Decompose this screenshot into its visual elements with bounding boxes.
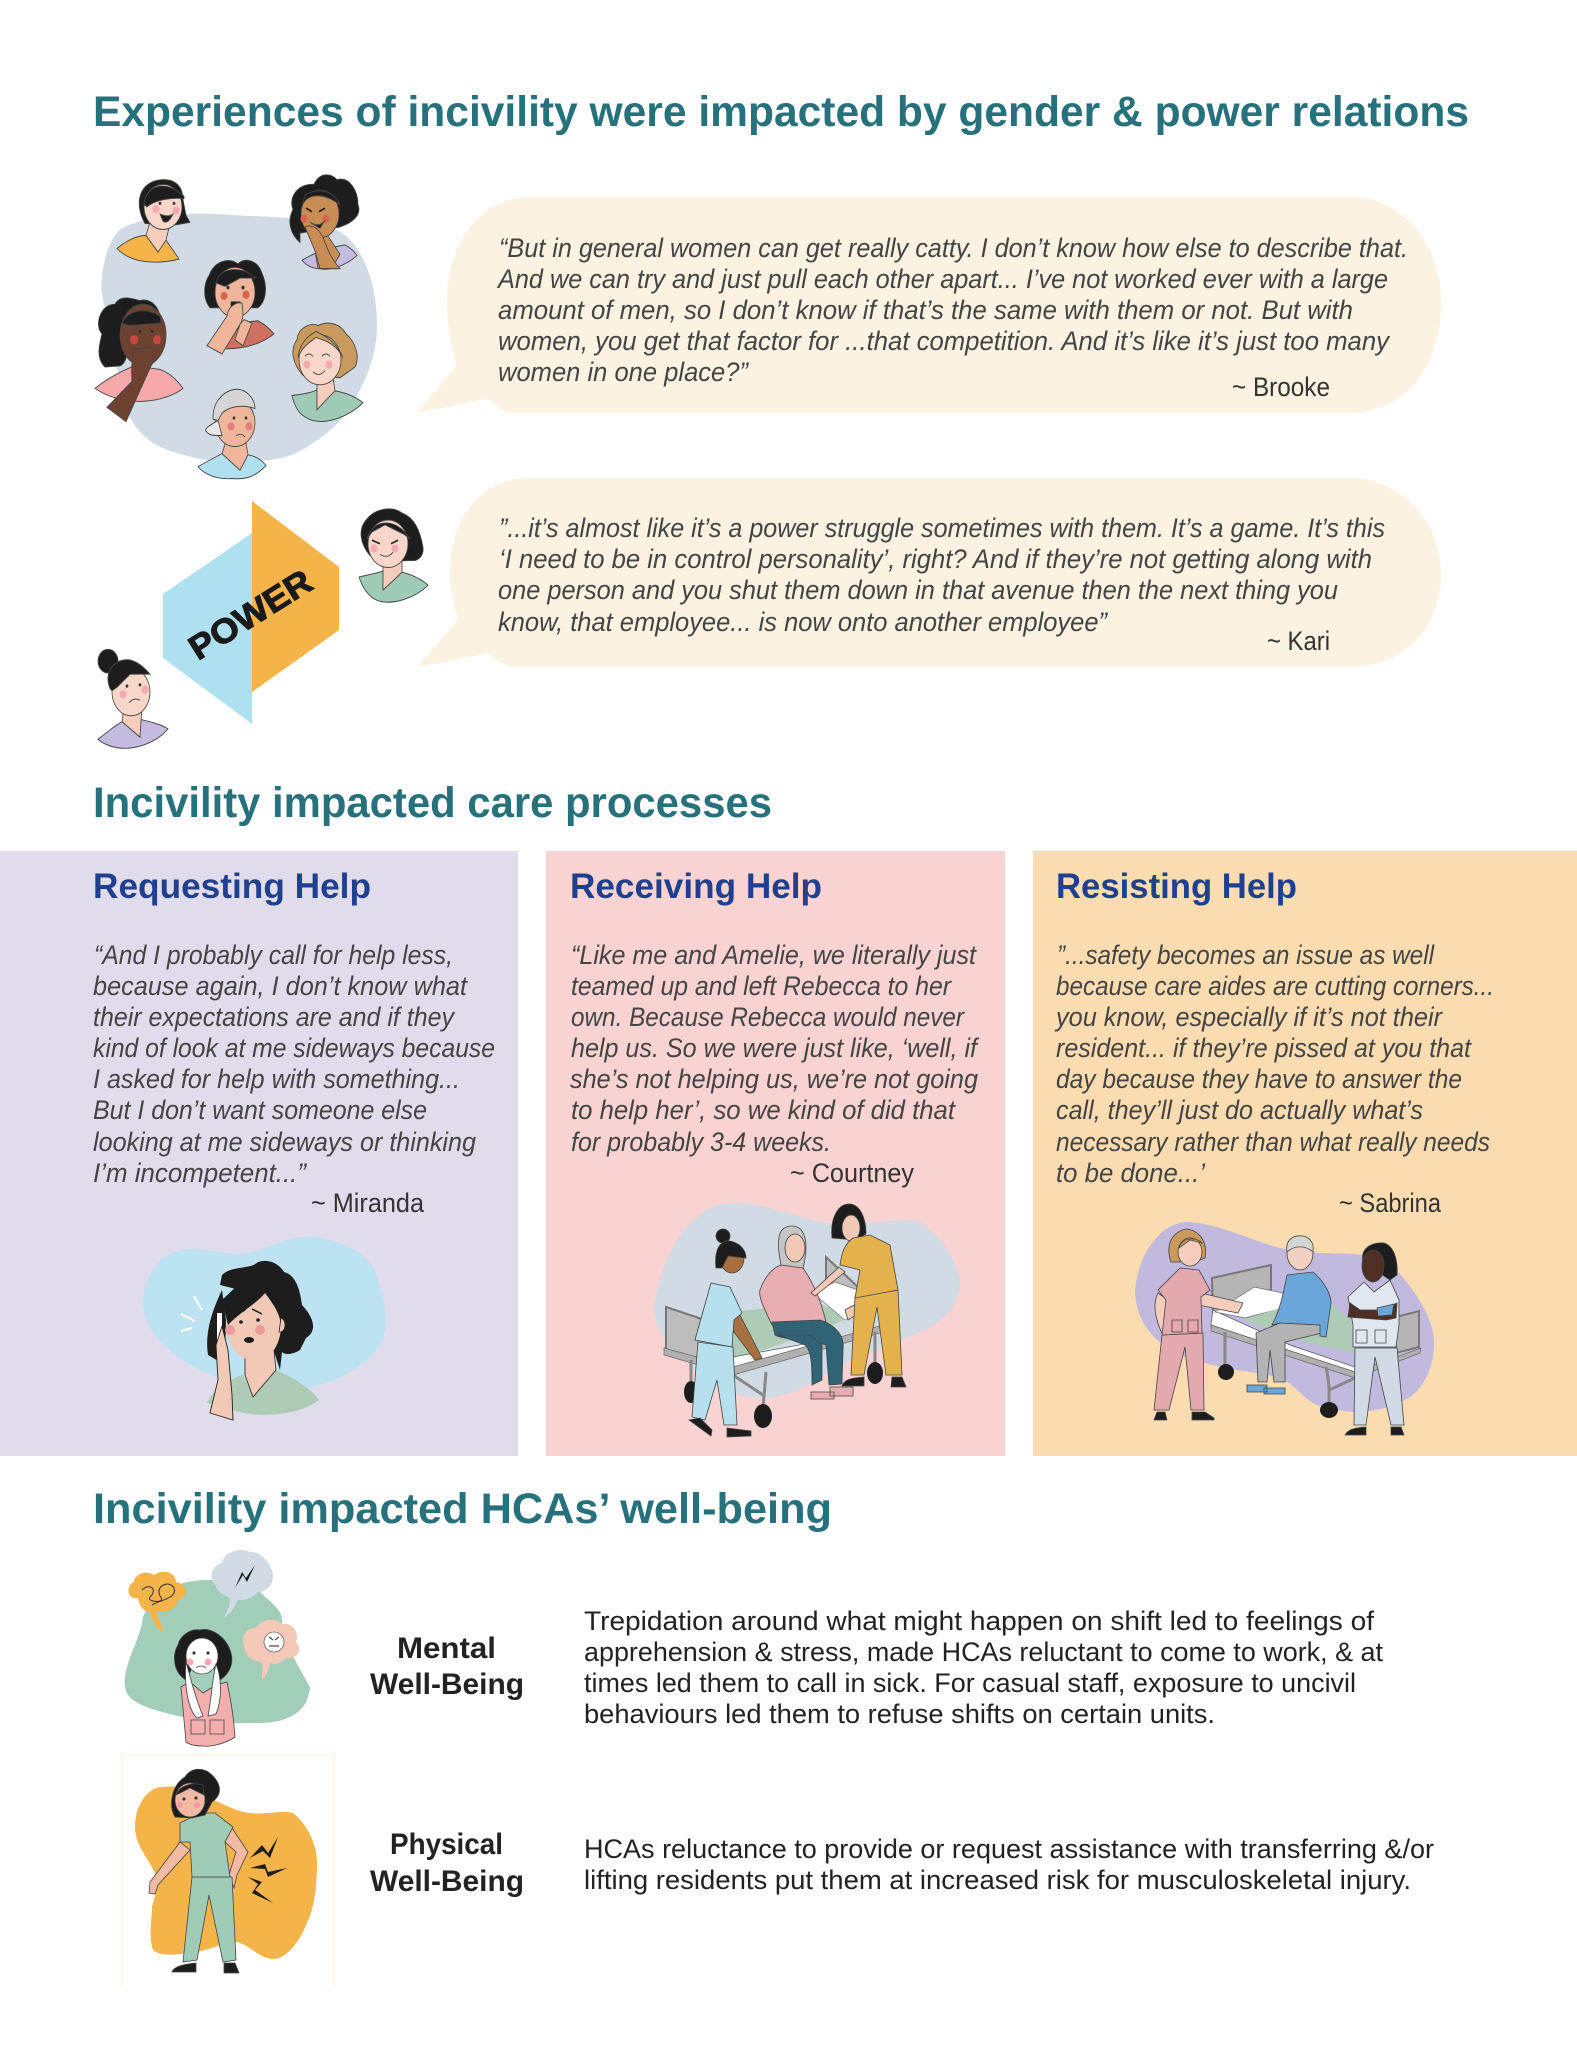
heading: well-being: Incivility impacted HCAs’ well-being (93, 1485, 832, 1533)
label: Mental Well-Being: Well-Being (370, 1668, 524, 1701)
title: Experiences of incivility were impacted by gender & power relations (93, 88, 1469, 136)
illustration: aide with back pain (122, 1755, 334, 1987)
panel: Receiving Help: ~ Courtney (790, 1158, 914, 1188)
speech bubble: Brooke quote (417, 197, 1441, 413)
resident (1247, 1236, 1331, 1394)
panel: Resisting Help: to be done...’ (1056, 1158, 1206, 1188)
aide in pink (1154, 1229, 1243, 1420)
text: mental well-being description: behaviours led them to refuse shifts on certain units. (584, 1699, 1215, 1729)
thought cloud: tangled (128, 1572, 186, 1632)
panel: Resisting Help: ”...safety becomes an issue as well (1057, 940, 1435, 970)
illustration: worried woman on phone (143, 1237, 386, 1420)
illustration: stressed aide with thought clouds (125, 1550, 310, 1746)
panel: Requesting Help: But I don’t want someone else (93, 1095, 427, 1125)
person: left, dark skin (95, 298, 183, 422)
people in the power struggle (98, 509, 428, 748)
power hexagon: POWER (182, 562, 319, 668)
illustration: power struggle (98, 501, 428, 748)
label: Mental Well-Being: Mental (397, 1632, 496, 1665)
person: centre (205, 260, 274, 354)
panel: Requesting Help: I asked for help with something... (93, 1064, 460, 1094)
panel: Resisting Help: necessary rather than what really needs (1056, 1127, 1490, 1157)
person: right, blonde (292, 323, 363, 421)
aide in white (1345, 1243, 1404, 1435)
person: top right (290, 175, 359, 269)
panel: Resisting Help: you know, especially if it’s not their (1054, 1002, 1443, 1032)
label: Physical Well-Being: Well-Being (370, 1865, 524, 1898)
text: mental well-being description: Trepidation around what might happen on shift led to feelings of (584, 1606, 1375, 1636)
speech bubble: Brooke quote: women in one place?” (498, 357, 749, 387)
panel: Requesting Help: their expectations are and if they (93, 1002, 455, 1032)
speech bubble: Brooke quote: women, you get that factor for ...that competition. And it’s like it’s just too many (498, 326, 1390, 356)
panel: Requesting Help: because again, I don’t know what (93, 971, 468, 1001)
illustration: two aides helping a resident (654, 1203, 960, 1437)
panel: Requesting Help (0, 851, 518, 1456)
panel: Resisting Help: Resisting Help (1056, 867, 1297, 906)
label: Physical Well-Being: Physical (390, 1828, 503, 1861)
speech bubble: Brooke quote: amount of men, so I don’t know if that’s the same with them or not. But with (498, 295, 1353, 325)
speech bubble: Kari quote: ~ Kari (1267, 626, 1330, 656)
illustration: aides arguing around a resident (1135, 1222, 1434, 1435)
speech bubble: Kari quote: one person and you shut them down in that avenue then the next thing you (498, 575, 1338, 605)
panel: Receiving Help: “Like me and Amelie, we literally just (571, 940, 977, 970)
text: physical well-being description: HCAs reluctance to provide or request assistance with transferring &/or (584, 1834, 1434, 1864)
panel: Resisting Help: resident... if they’re pissed at you that (1056, 1033, 1472, 1063)
panel: Requesting Help: I’m incompetent...” (93, 1158, 307, 1188)
panel: Resisting Help: day because they have to answer the (1056, 1064, 1462, 1094)
thought cloud: lightning (211, 1550, 273, 1617)
speech bubble: Kari quote: ‘I need to be in control personality’, right? And if they’re not getting along with (499, 544, 1372, 574)
panel: Receiving Help: teamed up and left Rebecca to her (571, 971, 952, 1001)
aide in blue (689, 1229, 762, 1437)
panel: Resisting Help: call, they’ll just do actually what’s (1056, 1095, 1423, 1125)
panel: Requesting Help: ~ Miranda (311, 1188, 425, 1218)
panel: Requesting Help: looking at me sideways or thinking (93, 1127, 476, 1157)
text: mental well-being description (584, 1606, 1383, 1729)
panel: Requesting Help: “And I probably call for help less, (94, 940, 453, 970)
resident (760, 1226, 853, 1399)
panel: Requesting Help: Requesting Help (93, 867, 371, 906)
panel: Resisting Help (1033, 851, 1577, 1456)
person: bottom, grey hair (198, 389, 266, 479)
speech bubble: Kari quote (417, 478, 1441, 667)
pain bolts (248, 1837, 287, 1903)
speech bubble: Brooke quote: ~ Brooke (1232, 372, 1330, 402)
person: confident woman (359, 509, 428, 602)
panel: Receiving Help: Receiving Help (570, 867, 822, 906)
aide in yellow (811, 1204, 906, 1387)
speech bubble: Kari quote: ”...it’s almost like it’s a power struggle sometimes with them. It’s a game. It’s this (499, 513, 1385, 543)
speech bubble: Kari quote: know, that employee... is now onto another employee” (498, 607, 1108, 637)
speech bubble: Brooke quote: “But in general women can get really catty. I don’t know how else to describe that. (499, 233, 1408, 263)
person: worried woman (98, 649, 168, 748)
panel: Receiving Help (546, 851, 1005, 1456)
text: physical well-being description: lifting residents put them at increased risk for musculoskeletal injury. (584, 1865, 1411, 1895)
panel: Resisting Help: ~ Sabrina (1339, 1188, 1442, 1218)
aide figure (149, 1769, 248, 1973)
panel: Receiving Help: own. Because Rebecca would never (571, 1002, 965, 1032)
label: Mental Well-Being (370, 1632, 524, 1701)
thought cloud: angry face (243, 1620, 299, 1680)
label: Physical Well-Being (370, 1828, 524, 1898)
panel: Receiving Help: she’s not helping us, we’re not going (570, 1064, 978, 1094)
power hexagon (163, 501, 339, 724)
text: mental well-being description: times led them to call in sick. For casual staff, exposure to uncivil (584, 1668, 1356, 1698)
person: top left (117, 180, 190, 262)
panel: Receiving Help: to help her’, so we kind of did that (571, 1095, 956, 1125)
text: physical well-being description (584, 1834, 1434, 1895)
panel: Requesting Help: kind of look at me sideways because (93, 1033, 495, 1063)
speech bubble: Brooke quote: And we can try and just pull each other apart... I’ve not worked ever with a large (496, 264, 1388, 294)
panel: Receiving Help: help us. So we were just like, ‘well, if (571, 1033, 979, 1063)
heading: care processes: Incivility impacted care processes (93, 779, 772, 827)
illustration: group of women gossiping (95, 175, 377, 479)
stressed aide (174, 1630, 235, 1746)
panel: Receiving Help: for probably 3-4 weeks. (571, 1127, 831, 1157)
text: mental well-being description: apprehension & stress, made HCAs reluctant to come to work, & at (584, 1637, 1383, 1667)
panel: Resisting Help: because care aides are cutting corners... (1056, 971, 1494, 1001)
